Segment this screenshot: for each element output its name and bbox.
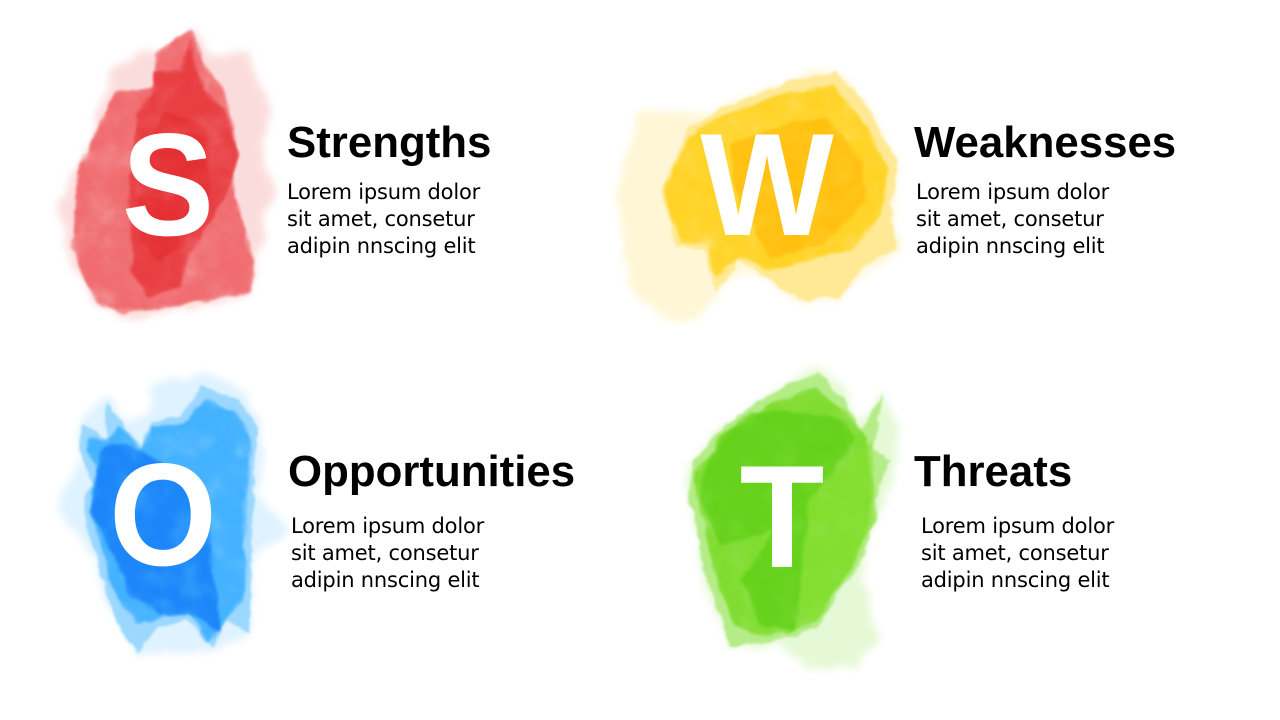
body text: weaknesses: sit amet, consetur xyxy=(916,207,1104,231)
body text: weaknesses: Lorem ipsum dolor xyxy=(916,180,1110,204)
body text: strengths: Lorem ipsum dolor xyxy=(287,180,481,204)
body text: strengths: sit amet, consetur xyxy=(287,207,475,231)
icon: green watercolor splash xyxy=(684,366,900,668)
body text: weaknesses: adipin nnscing elit xyxy=(916,234,1104,258)
heading: opportunities: Opportunities xyxy=(288,447,575,496)
panel: opportunities xyxy=(55,372,575,655)
letter T: T xyxy=(740,436,824,599)
body text: threats: adipin nnscing elit xyxy=(921,568,1109,592)
body text: opportunities: sit amet, consetur xyxy=(291,541,479,565)
body text: opportunities: Lorem ipsum dolor xyxy=(291,514,485,538)
heading: weaknesses: Weaknesses xyxy=(914,118,1176,167)
letter S: S xyxy=(122,104,214,267)
body text: opportunities: adipin nnscing elit xyxy=(291,568,479,592)
panel: strengths xyxy=(58,28,491,318)
icon: blue watercolor splash xyxy=(55,372,290,655)
panel: threats xyxy=(684,366,1115,668)
letter W: W xyxy=(700,104,834,266)
heading: strengths: Strengths xyxy=(287,118,491,167)
icon: yellow watercolor splash xyxy=(614,68,902,322)
letter O: O xyxy=(109,434,217,597)
body text: strengths: adipin nnscing elit xyxy=(287,234,475,258)
panel: weaknesses xyxy=(614,68,1176,322)
body text: threats: Lorem ipsum dolor xyxy=(921,514,1115,538)
heading: threats: Threats xyxy=(914,447,1072,496)
icon: red watercolor splash xyxy=(58,28,274,318)
body text: threats: sit amet, consetur xyxy=(921,541,1109,565)
